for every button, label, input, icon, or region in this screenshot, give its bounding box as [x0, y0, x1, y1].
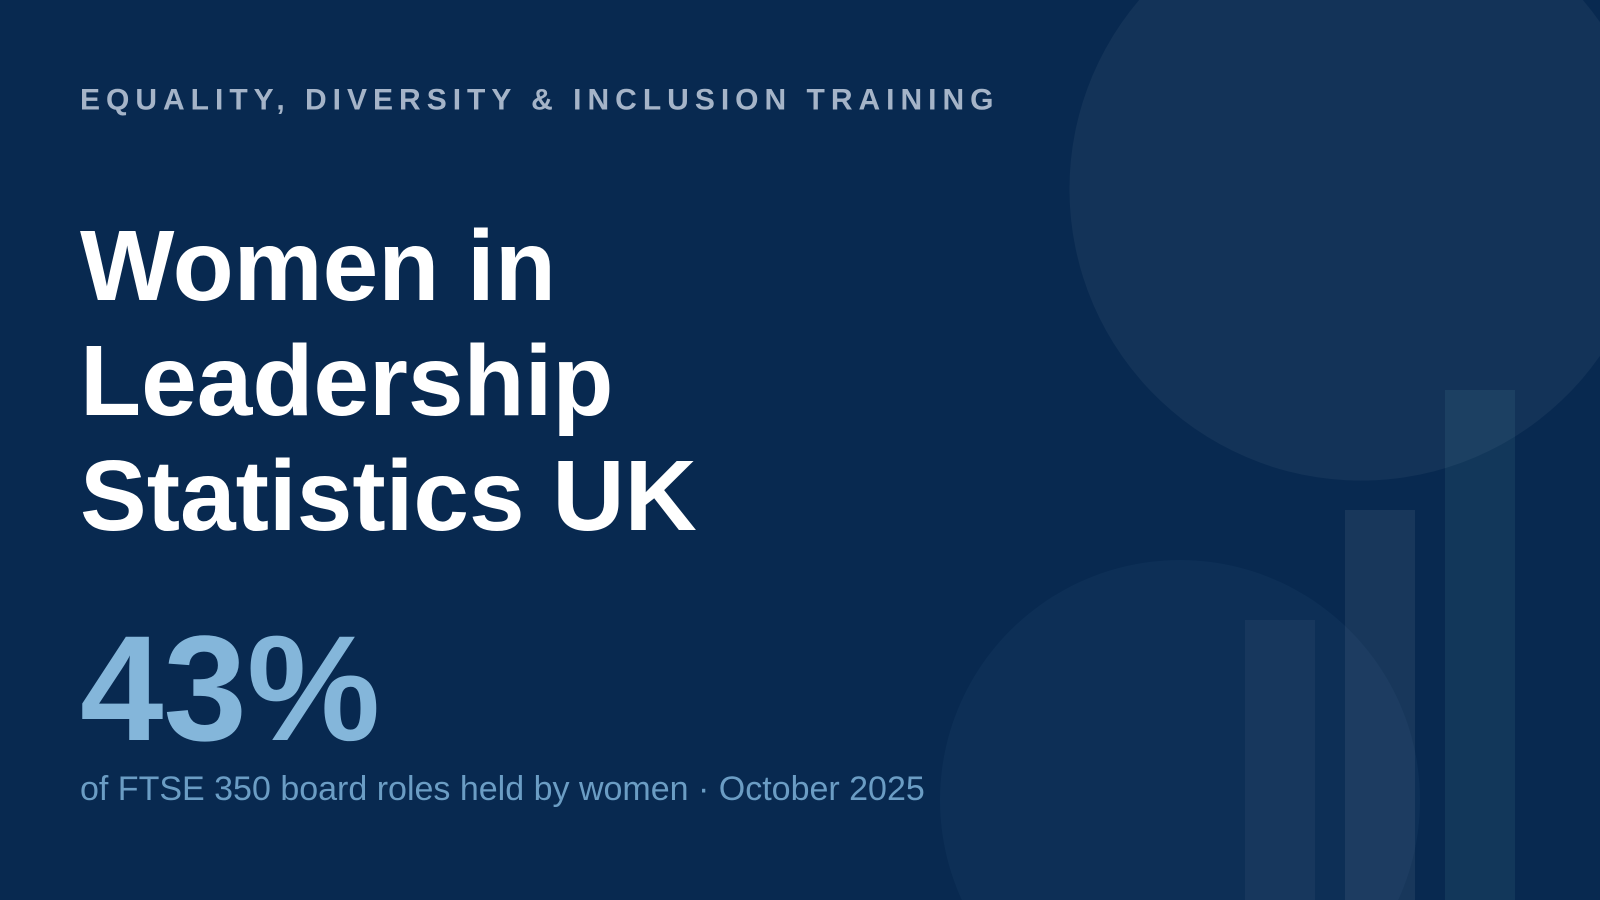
title: Statistics UK	[80, 440, 697, 552]
decorative circle: bottom centre	[940, 560, 1420, 900]
statistic caption: of FTSE 350 board roles held by women · October 2025	[80, 770, 925, 808]
headline statistic: 43%	[80, 604, 380, 772]
title: Women in	[80, 210, 556, 322]
decorative circle: top right	[1069, 0, 1600, 481]
title: Leadership	[80, 325, 614, 437]
bar: tall	[1445, 390, 1515, 900]
bar: short	[1245, 620, 1315, 900]
eyebrow label: EQUALITY, DIVERSITY & INCLUSION TRAINING	[80, 84, 1000, 116]
decorative bar chart	[1245, 390, 1515, 900]
bar: medium	[1345, 510, 1415, 900]
